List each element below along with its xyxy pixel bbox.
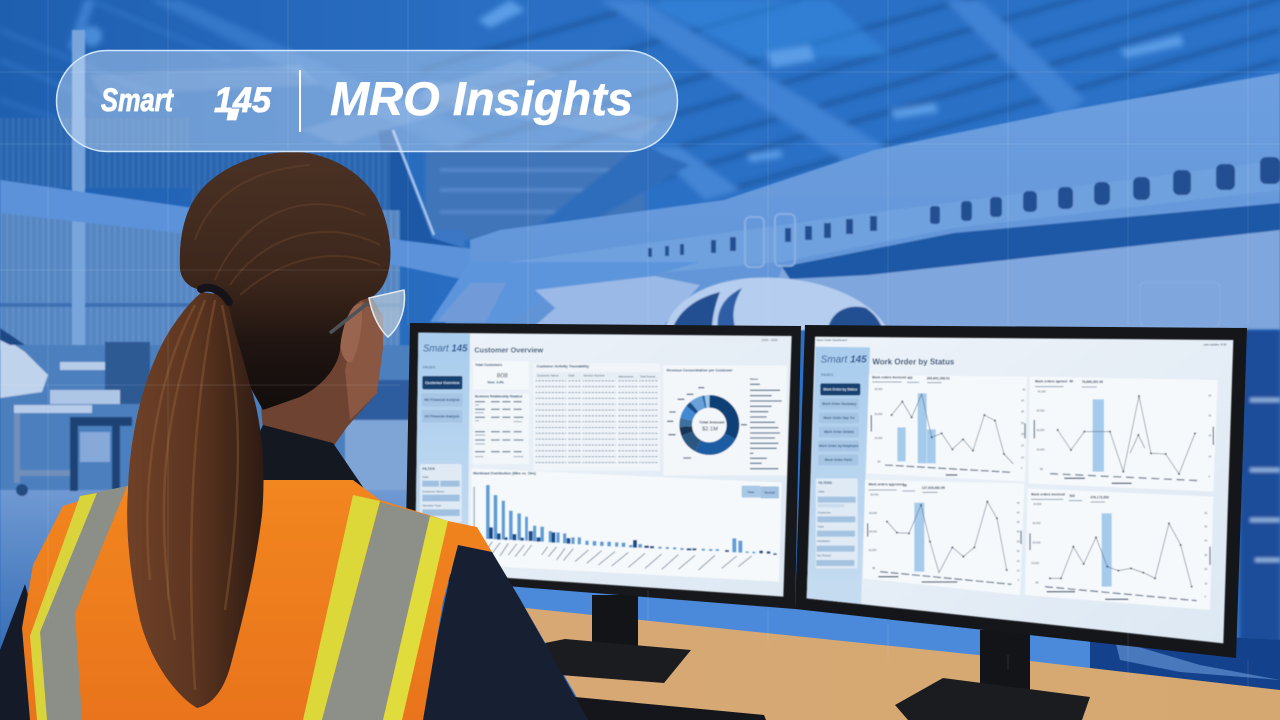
nav button: Work Order Parts [818, 455, 858, 465]
strip of hangar behind the desk [500, 575, 1280, 692]
bars: available hours [486, 485, 755, 553]
card: Workload Distribution bar chart: Workload Distribution (Mhs vs. Dhs) [473, 471, 537, 475]
panel: work orders invoiced: 463 [907, 376, 913, 380]
axes: 40 [1021, 399, 1024, 403]
card: Revenue Concentration per Customer donut chart: Revenue Concentration per Customer [667, 368, 733, 372]
card: Customer Activity Traceability table: Customer Activity Traceability [537, 365, 590, 369]
panel: work orders opened: 76,600,391.00 [1082, 380, 1103, 384]
cheatline stripe [782, 203, 1280, 279]
filter panel: Hardware [817, 539, 830, 543]
dashboard title: Customer Overview [474, 345, 543, 354]
nav button: Work Order Details: Work Order Details [824, 430, 854, 434]
left yellow stripe [30, 493, 97, 720]
header pill [56, 50, 678, 152]
pages label: PAGES [423, 366, 436, 370]
card: Customer Activity Traceability table: Maintenance [618, 375, 634, 379]
aircraft wing and wing root [430, 262, 700, 330]
line [886, 501, 1008, 573]
card: Total Customers: Total Customers [475, 363, 502, 367]
line [1057, 395, 1196, 475]
hair tie [201, 288, 229, 302]
axes [1036, 390, 1212, 479]
nav button: Work Order Summary [820, 399, 859, 409]
line [891, 394, 1013, 464]
axes: $0 [1036, 580, 1039, 584]
sidebar [807, 347, 870, 604]
technician [0, 152, 588, 720]
panel: work orders invoiced by month [1025, 488, 1213, 610]
title: MRO Insights: MRO Insights [330, 72, 633, 125]
axes: 60 [1204, 511, 1208, 515]
axes: 15 [1208, 434, 1212, 438]
hi-vis vest [22, 480, 492, 720]
axes: 40 [1017, 511, 1020, 515]
panel: work orders invoiced: 265,691,266.01 [927, 376, 950, 380]
ponytail [127, 292, 264, 708]
filter panel: FILTERS [818, 481, 833, 485]
axes: 25 [1017, 539, 1020, 543]
donut [686, 401, 733, 449]
axes: 0 [1021, 466, 1023, 470]
axes: 30 [1021, 421, 1024, 425]
filter panel: Date [422, 475, 429, 479]
panel: work orders invoiced by month: 533 [1069, 494, 1075, 498]
panel: work orders approved: Work orders approved [868, 483, 904, 487]
toggle buttons [742, 486, 779, 498]
card: Customer Activity Traceability table: Total Amount [640, 375, 656, 379]
axes: 35 [1017, 520, 1020, 524]
axis labels [485, 542, 752, 570]
hair strands [195, 165, 380, 295]
axes [1031, 502, 1208, 599]
door outlines [745, 214, 1220, 327]
glass pill background [56, 50, 678, 152]
workshop area [0, 328, 420, 670]
axes: 10,000 [1036, 448, 1045, 452]
axes: 40 [1204, 538, 1208, 542]
right shoulder sleeve [420, 540, 588, 720]
panel: work orders opened [1028, 377, 1218, 492]
dashboard: Work Order by Status [807, 337, 1233, 643]
axes: 15 [1017, 559, 1020, 563]
card: Business Relationship Readout [473, 393, 529, 464]
filter panel: Decision Type [422, 504, 441, 508]
left monitor [405, 323, 801, 609]
filter panel: Type [817, 524, 824, 528]
axes: 20 [1017, 549, 1020, 553]
bars [897, 393, 936, 463]
card: Customer Activity Traceability table: Customer Name [537, 374, 559, 378]
axes: 0 [1018, 578, 1020, 582]
logo: Smart 145: 145 [214, 81, 272, 120]
hair [180, 152, 390, 410]
axes: $0 [872, 566, 876, 570]
dashboard: Work Order by Status: Last update: 6:30 [1203, 342, 1227, 346]
nav button: Work Order Parts: Work Order Parts [825, 458, 852, 462]
panel: work orders invoiced by month: 476,173,553 [1090, 496, 1109, 500]
sidebar logo: Smart 145 [423, 343, 468, 354]
axes: 40,000 [1033, 502, 1042, 506]
lower fuselage [760, 205, 1280, 330]
axes: $0 [1040, 467, 1043, 471]
card: Total Customers [473, 361, 529, 389]
axes: 20 [1208, 414, 1212, 418]
nav button: MO Financial Analysis [422, 393, 462, 407]
dashboard: Customer Overview [415, 333, 792, 597]
bar [1102, 513, 1112, 587]
axes: 30,000 [869, 530, 878, 534]
axes: 60,000 [870, 493, 879, 497]
axes: 0 [1204, 595, 1206, 599]
axes: 10 [1208, 455, 1212, 459]
axes: 10 [1204, 581, 1208, 585]
desk [525, 608, 1280, 720]
filter panel: Date [818, 489, 825, 493]
card: Total Customers: New: 4.0% [487, 381, 504, 385]
axes: 10 [1017, 569, 1020, 573]
card: Customer Activity Traceability table [533, 363, 660, 471]
axes: 20,000 [1036, 428, 1045, 432]
vest orange body [22, 480, 492, 720]
panel: work orders opened: Work orders opened [1035, 379, 1067, 383]
panel: work orders approved: 58 [903, 484, 907, 488]
filter panel [816, 478, 858, 568]
axes: 0 [1208, 475, 1210, 479]
donut slice labels [667, 388, 747, 458]
filter panel [420, 464, 462, 522]
ear [340, 303, 362, 362]
filter panel: Customer Name [422, 490, 444, 494]
passenger windows [648, 157, 1280, 257]
pale truss reflections inside the pill [90, 60, 660, 145]
right yellow stripe [303, 495, 380, 720]
sidebar [415, 333, 470, 575]
card: Workload Distribution bar chart [470, 468, 782, 582]
ponytail strands [147, 300, 238, 690]
logo: Smart 145 [101, 81, 272, 120]
logo: Smart 145: Smart [101, 82, 174, 118]
axes: 30 [1208, 394, 1212, 398]
card: Revenue Concentration per Customer donut chart: $2.1M [702, 427, 718, 433]
outer yellow stripe [383, 516, 448, 720]
bars: demand hours [489, 527, 777, 555]
cabinets [105, 342, 150, 404]
nav button: Customer Overview: Customer Overview [425, 381, 460, 385]
filter panel: Customer [818, 510, 831, 514]
axes: 45 [1017, 501, 1020, 505]
toggle buttons: View [748, 490, 755, 494]
axes: 40,000 [1038, 390, 1046, 394]
vertical divider [299, 70, 301, 132]
dashboard title: Work Order by Status [872, 357, 955, 366]
jet engine [665, 278, 888, 330]
card: Business Relationship Readout: Business Relationship Readout [475, 394, 523, 398]
donut legend: Name [750, 377, 758, 381]
left jacket sleeve [0, 584, 45, 720]
nav button: Customer Overview [422, 376, 462, 389]
top bar controls: 2024 - 2025 [762, 338, 778, 342]
nav button: Work Order Summary: Work Order Summary [822, 402, 857, 406]
bar [914, 503, 924, 572]
right monitor [795, 325, 1247, 658]
axes: 35 [1021, 410, 1024, 414]
nav button: Work Order by Employee: Work Order by Employee [819, 444, 859, 448]
glasses [330, 290, 404, 337]
panel: work orders approved [863, 480, 1024, 595]
nav button: Work Order by Status: Work Order by Status [823, 388, 858, 392]
bar [1093, 399, 1104, 472]
axes: 50 [1022, 388, 1026, 392]
axes [868, 493, 1020, 582]
panel: work orders invoiced [867, 375, 1027, 482]
nav button: MO Financial Analysis: MO Financial Analysis [424, 398, 460, 402]
panel: work orders approved: 137,028,082.95 [922, 486, 945, 490]
axes: 30,000 [1036, 408, 1045, 412]
nav button: SO Financial Analysis: SO Financial Analysis [425, 415, 459, 419]
axes: 20 [1204, 567, 1208, 571]
ceiling stripes and beams [0, 0, 1280, 210]
sidebar logo: Smart 145 [821, 355, 867, 366]
axes: 50 [1204, 524, 1208, 528]
panel: work orders invoiced by month: Work orders invoiced [1031, 492, 1065, 496]
donut centre value: Total Amount [699, 419, 725, 424]
axes: 20 [1021, 432, 1024, 436]
axes: 20,000 [868, 548, 877, 552]
line [1049, 522, 1193, 588]
axes: 30 [1204, 553, 1208, 557]
axes: 40,000 [869, 511, 878, 515]
toggle buttons: Normal [765, 491, 775, 495]
pages label: PAGES [821, 373, 834, 377]
monitor bezel [795, 325, 1247, 658]
right-hand dark hangar wall [1240, 330, 1280, 690]
left hangar wall [0, 30, 500, 355]
axes: 20,000 [874, 412, 883, 416]
axes: 30,000 [874, 387, 883, 391]
back wall behind the tail [385, 145, 690, 260]
axes: 30 [1017, 530, 1020, 534]
workbench [14, 405, 92, 413]
card: Total Customers: 808 [497, 372, 508, 379]
panel: work orders opened: 59 [1069, 380, 1073, 384]
keyboard [575, 697, 766, 720]
axes [874, 387, 1026, 470]
left monitor stand [545, 595, 691, 683]
window belt [510, 160, 1280, 285]
axes: $0 [878, 459, 881, 463]
axes: 15 [1021, 444, 1024, 448]
filter panel: Tax Period [817, 554, 831, 558]
filter panel: FILTER [422, 467, 435, 471]
neck and face [260, 283, 383, 447]
card: Customer Activity Traceability table: Service Number [583, 374, 605, 378]
axes: 10,000 [1031, 561, 1040, 565]
top bar controls [721, 337, 789, 343]
dark table [70, 417, 132, 426]
nav button: SO Financial Analysis [422, 410, 462, 423]
top bar: Work Order Dashboard [816, 338, 847, 342]
nav button: Work Order Day Trx [819, 413, 859, 423]
left grey reflective stripe [40, 486, 127, 720]
small aircraft [0, 335, 48, 398]
axes: 10 [1021, 455, 1024, 459]
right monitor stand [895, 630, 1090, 720]
jacket collar [235, 425, 378, 505]
nav button: Work Order by Employee [818, 441, 859, 451]
axes: 20,000 [1032, 540, 1041, 544]
panel: work orders invoiced: Work orders invoiced [872, 375, 906, 379]
card: Customer Activity Traceability table: Date [568, 374, 575, 378]
nav button: Work Order Day Trx: Work Order Day Trx [823, 416, 855, 420]
nav button: Work Order by Status [820, 383, 860, 395]
axes: 10,000 [874, 436, 883, 440]
nav button: Work Order Details [819, 427, 859, 437]
cheek highlight [345, 300, 383, 420]
aircraft fuselage [440, 73, 1280, 330]
monitor bezel [405, 323, 801, 609]
axes: 30,000 [1032, 521, 1041, 525]
right grey reflective stripe [322, 502, 430, 720]
card: Revenue Concentration per Customer donut chart [663, 365, 787, 475]
aircraft tail fin [378, 130, 470, 250]
